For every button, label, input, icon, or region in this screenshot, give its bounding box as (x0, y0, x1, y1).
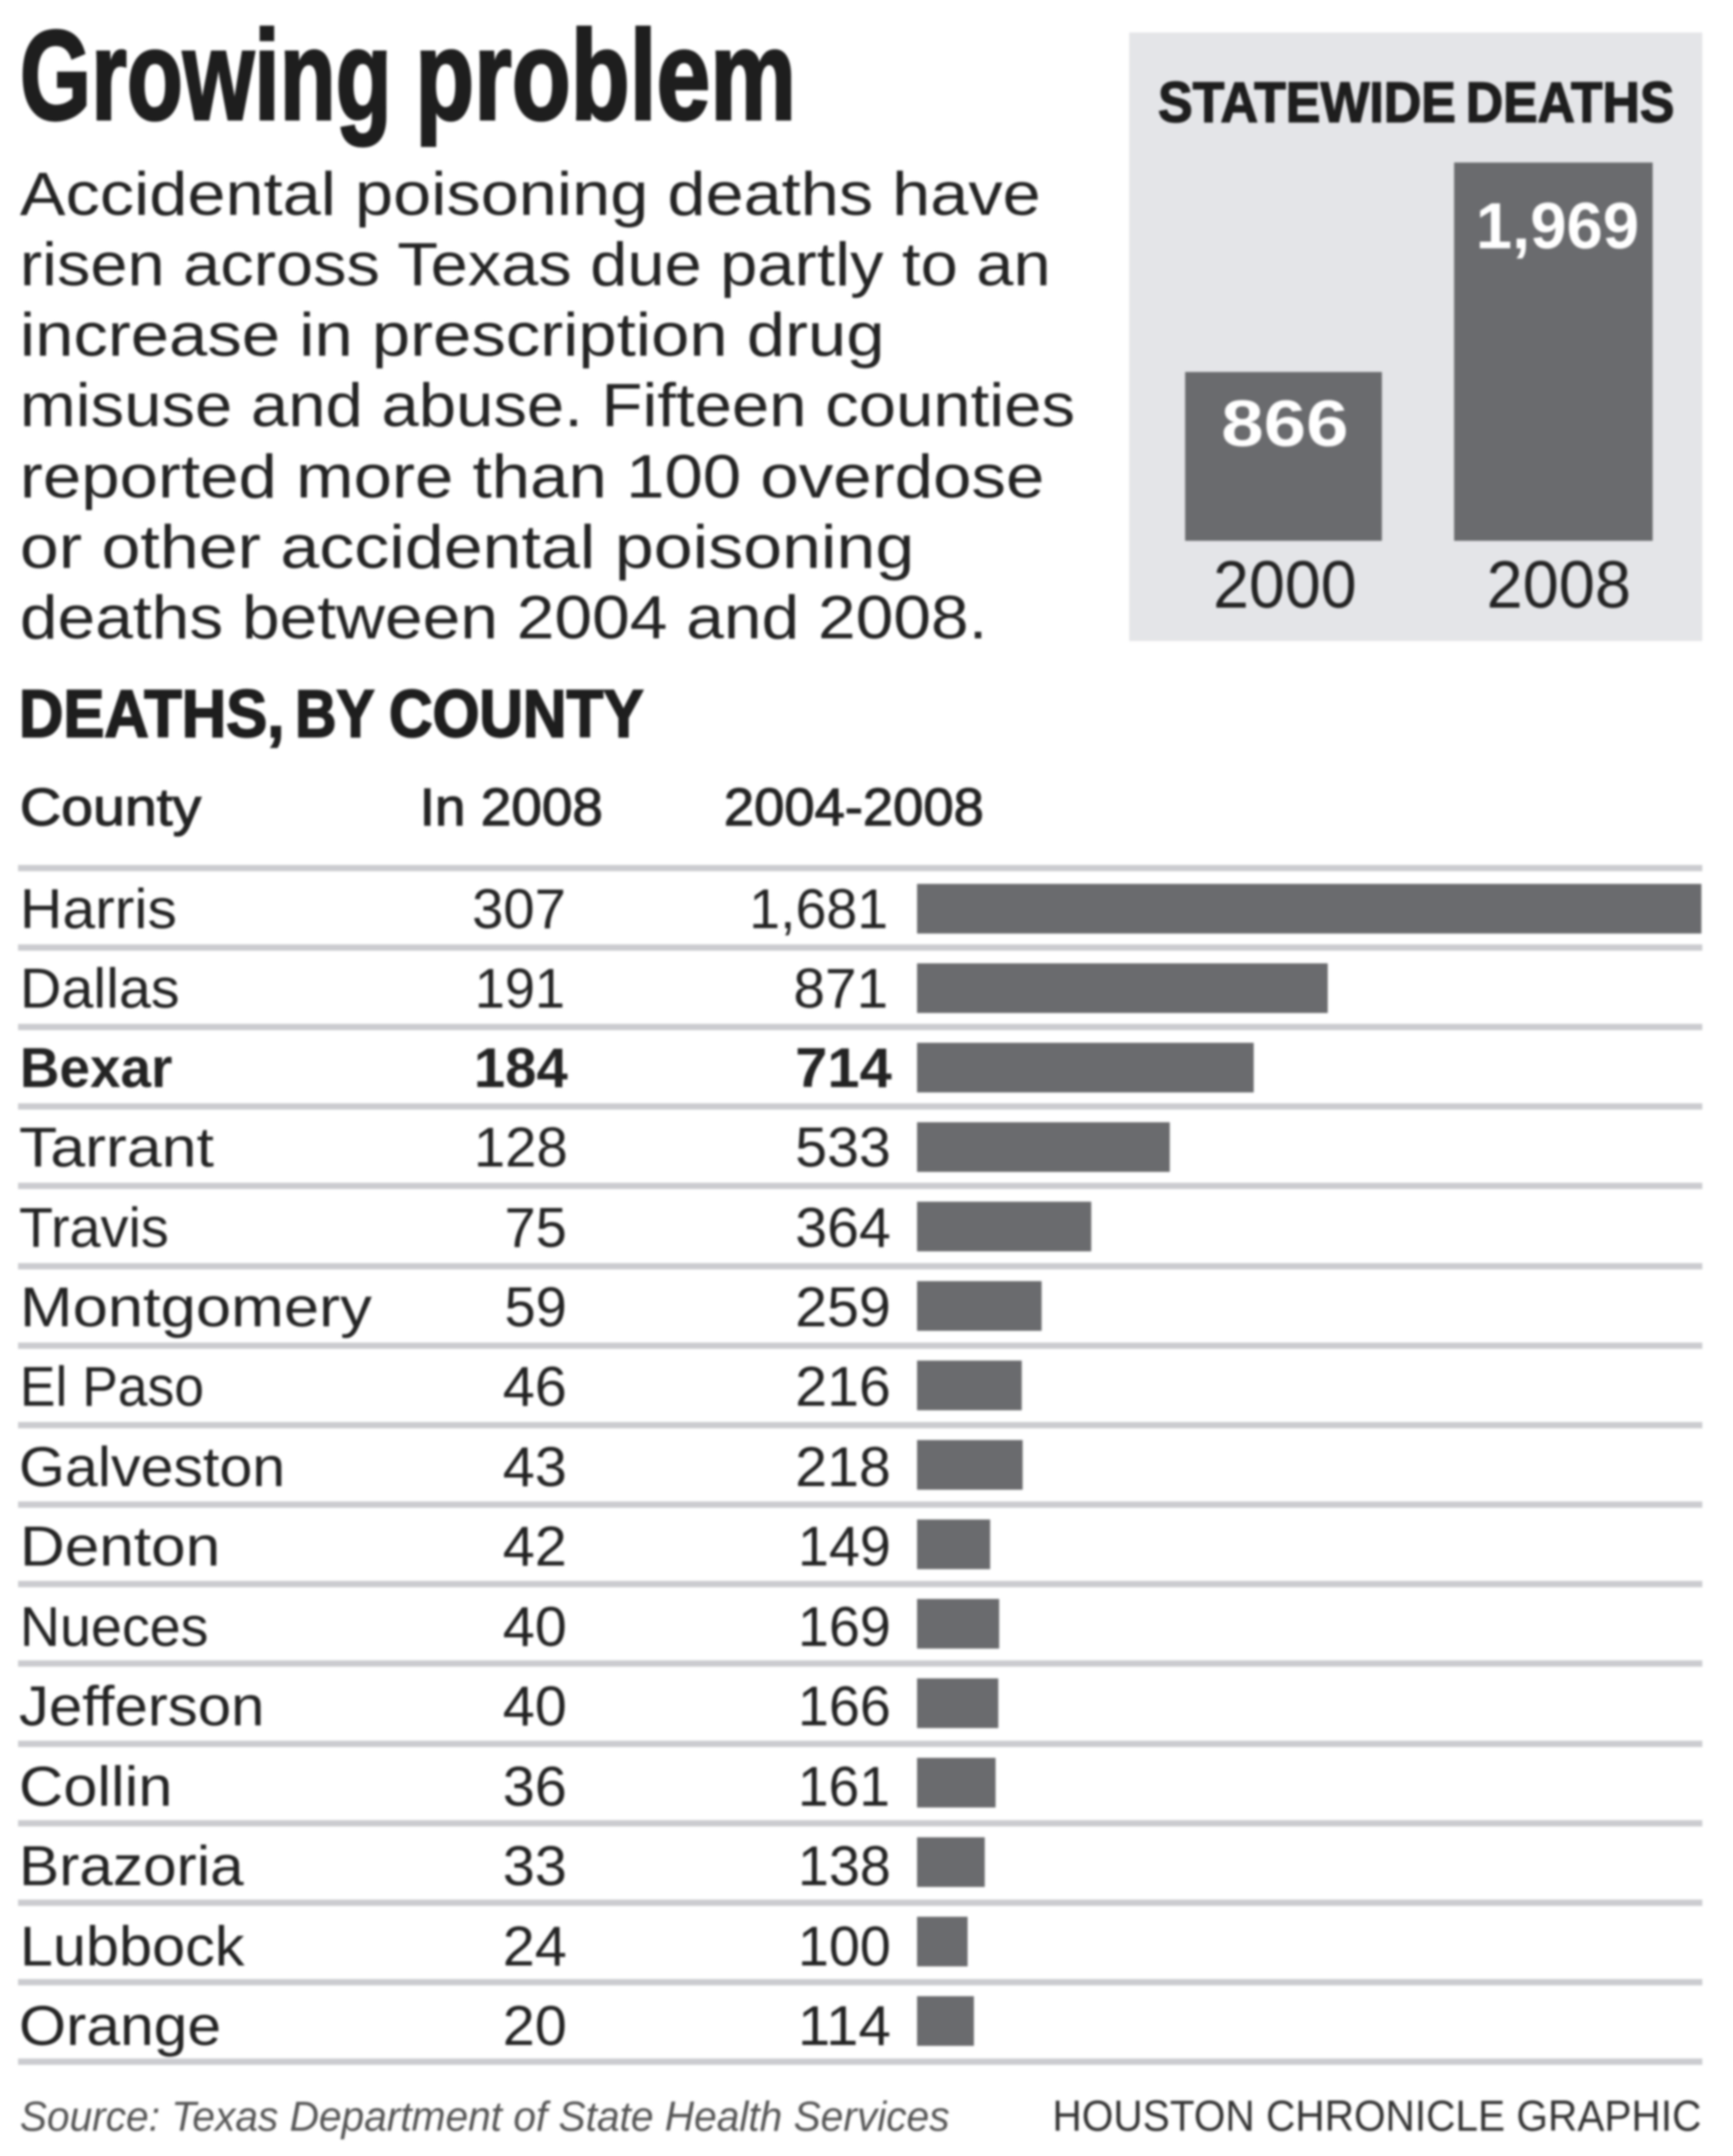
row: Bexar: Bexar (20, 1037, 172, 1100)
row: Denton: 42 (503, 1516, 567, 1578)
row: Collin (19, 1756, 996, 1818)
row: El Paso: 216 (795, 1356, 891, 1418)
row: Montgomery: 59 (505, 1277, 567, 1339)
row: El Paso: El Paso (20, 1356, 204, 1418)
row: Collin: 36 (503, 1756, 567, 1818)
intro text block: risen across Texas due partly to an (20, 230, 1051, 299)
row: Travis: Travis (19, 1197, 169, 1259)
row: Orange (19, 1995, 974, 2058)
row: Travis (19, 1197, 1091, 1259)
intro text block: deaths between 2004 and 2008. (20, 583, 987, 652)
row: Orange: 114 (798, 1995, 891, 2058)
panel: statewide deaths (1129, 33, 1702, 641)
row: Galveston (19, 1436, 1023, 1499)
row: Travis: 75 (505, 1197, 567, 1259)
section heading: deaths by county: COUNTY (389, 676, 644, 751)
row: Brazoria: 138 (798, 1835, 891, 1898)
row: Dallas (20, 958, 1328, 1020)
table header: In 2008 (420, 778, 603, 837)
table header: 2004-2008 (724, 778, 984, 837)
title: problem (415, 4, 796, 146)
title: Growing (20, 4, 392, 146)
section heading: deaths by county: BY (295, 676, 375, 751)
intro text block (20, 160, 1075, 652)
intro text block: increase in prescription drug (20, 301, 885, 369)
bar: 2000: 2000 (1213, 547, 1357, 622)
row: Galveston: 43 (503, 1436, 567, 1499)
row: Denton: 149 (798, 1516, 891, 1578)
credit: HOUSTON CHRONICLE GRAPHIC (1052, 2093, 1701, 2141)
intro text block: misuse and abuse. Fifteen counties (20, 371, 1075, 440)
row: Dallas: 871 (793, 958, 888, 1020)
row: Lubbock: 100 (798, 1916, 891, 1978)
table header (20, 778, 984, 837)
row: Harris: Harris (20, 878, 177, 941)
row: Lubbock: 24 (503, 1916, 567, 1978)
row: Jefferson (19, 1676, 998, 1738)
row: Jefferson: 166 (798, 1676, 891, 1738)
row: Galveston: 218 (795, 1436, 891, 1499)
row: Nueces: 169 (798, 1596, 891, 1659)
row: Harris: 1,681 (749, 878, 888, 941)
row: Brazoria: 33 (503, 1835, 567, 1898)
panel heading: DEATHS (1466, 71, 1674, 135)
row: Tarrant: 533 (795, 1117, 891, 1179)
source note: Source: Texas Department of State Health Services (20, 2093, 950, 2140)
panel heading (1158, 71, 1674, 135)
row: El Paso: 46 (503, 1356, 567, 1418)
row: Lubbock: Lubbock (20, 1916, 246, 1978)
row: Tarrant: 128 (474, 1117, 568, 1179)
row: Nueces (20, 1596, 999, 1659)
row: Nueces: 40 (503, 1596, 567, 1659)
row: Jefferson: Jefferson (19, 1676, 264, 1738)
row: Brazoria (19, 1835, 985, 1898)
row: Denton: Denton (20, 1516, 220, 1578)
bar: 2008: 1,969 (1476, 191, 1639, 263)
row: Dallas: 191 (475, 958, 565, 1020)
bar: 2008 (1454, 163, 1653, 622)
row: Dallas: Dallas (20, 958, 180, 1020)
row: Bexar: 714 (795, 1037, 893, 1100)
row: Denton (20, 1516, 990, 1578)
section heading: deaths by county (19, 676, 644, 751)
row: Tarrant (19, 1117, 1170, 1179)
intro text block: or other accidental poisoning (20, 513, 914, 581)
row: Orange: Orange (19, 1995, 221, 2058)
title (20, 4, 796, 146)
row: Galveston: Galveston (19, 1436, 285, 1499)
bar: 2000 (1185, 372, 1382, 622)
table header: County (20, 778, 201, 837)
row: Jefferson: 40 (503, 1676, 567, 1738)
row: Collin: Collin (19, 1756, 172, 1818)
bar: 2000: 866 (1221, 388, 1348, 460)
panel heading: STATEWIDE (1158, 71, 1456, 135)
intro text block: Accidental poisoning deaths have (20, 160, 1041, 228)
row: Montgomery: Montgomery (20, 1277, 372, 1339)
bar: 2008: 2008 (1487, 547, 1631, 622)
row: Bexar (20, 1037, 1254, 1100)
row: Lubbock (20, 1916, 968, 1978)
row: Tarrant: Tarrant (19, 1117, 214, 1179)
row: Harris (20, 878, 1701, 941)
row: Collin: 161 (798, 1756, 890, 1818)
intro text block: reported more than 100 overdose (20, 442, 1044, 511)
row: Bexar: 184 (474, 1037, 569, 1100)
row: Montgomery (20, 1277, 1042, 1339)
row: Travis: 364 (795, 1197, 891, 1259)
row: Orange: 20 (503, 1995, 567, 2058)
row: Nueces: Nueces (20, 1596, 209, 1659)
row: Montgomery: 259 (795, 1277, 891, 1339)
row: Harris: 307 (472, 878, 566, 941)
section heading: deaths by county: DEATHS, (19, 676, 284, 751)
row: Brazoria: Brazoria (19, 1835, 245, 1898)
row: El Paso (20, 1356, 1022, 1418)
